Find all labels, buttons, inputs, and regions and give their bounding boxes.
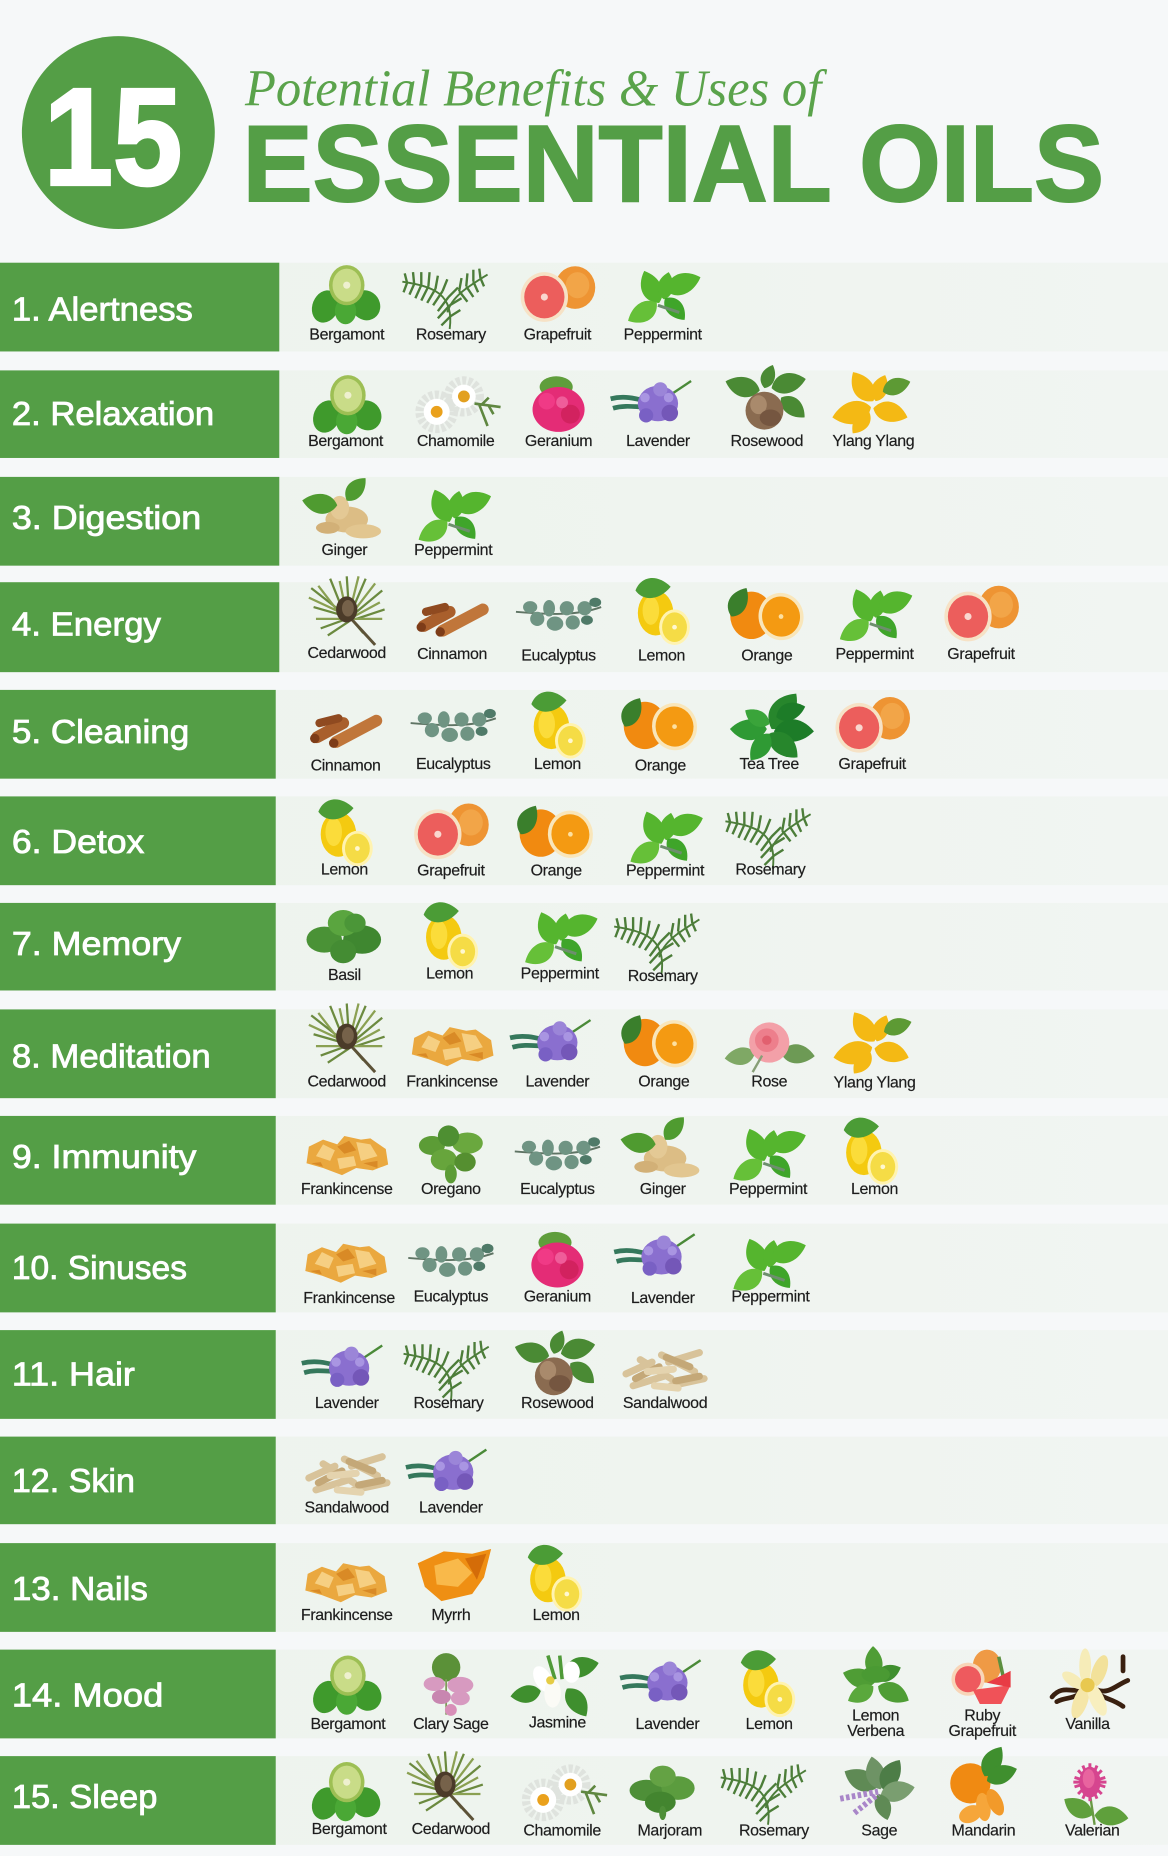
oil: tea tree: Tea Tree: [740, 756, 799, 773]
oil: mandarin: [950, 1742, 1020, 1839]
oil: valerian: Valerian: [1065, 1822, 1120, 1839]
oil: frankincense: Frankincense: [303, 1290, 395, 1307]
oil: cinnamon: Cinnamon: [417, 646, 487, 663]
oil: basil: Basil: [328, 967, 361, 984]
oil: geranium: [525, 376, 592, 450]
oil: lavender: [302, 1345, 382, 1412]
row 8: Meditation: [0, 1003, 1168, 1098]
oil: rosemary: [725, 808, 811, 879]
oil: cedarwood: [407, 1751, 490, 1838]
oil: frankincense: [301, 1136, 393, 1198]
oil: vanilla: Vanilla: [1065, 1716, 1110, 1733]
oil: ruby grapefruit: Ruby: [964, 1708, 1001, 1725]
row 5: Cleaning: [0, 686, 1168, 779]
oil: ruby grapefruit: [948, 1650, 1017, 1740]
oil: bergamont: [307, 1762, 387, 1838]
oil: grapefruit: Grapefruit: [417, 863, 486, 880]
oil: bergamont: Bergamont: [312, 1821, 387, 1838]
oil: lavender: Lavender: [636, 1716, 700, 1733]
oil: clary sage: Clary Sage: [413, 1716, 489, 1733]
oil: geranium: Geranium: [525, 433, 592, 450]
oil: lemon: [530, 690, 586, 773]
oil: lemon: [317, 797, 373, 879]
row label: 15. Sleep: [12, 1779, 157, 1816]
oil: lemon: Lemon: [638, 647, 685, 664]
row 6: Detox: [0, 796, 1168, 885]
oil: bergamont: Bergamont: [310, 1716, 386, 1733]
oil: geranium: Geranium: [524, 1289, 591, 1306]
row 10: Sinuses: [0, 1224, 1168, 1312]
oil: cedarwood: Cedarwood: [307, 1073, 386, 1090]
oil: eucalyptus: Eucalyptus: [521, 647, 596, 664]
oil: ylang ylang: Ylang Ylang: [834, 1075, 915, 1092]
oil: bergamont: Bergamont: [308, 433, 384, 450]
row 11: Hair: [0, 1328, 1168, 1419]
badge: circle with number 15: [22, 36, 215, 229]
oil: eucalyptus: [515, 1137, 600, 1198]
oil: lavender: [406, 1450, 486, 1516]
oil: eucalyptus: [411, 709, 496, 773]
oil: eucalyptus: [516, 598, 601, 664]
oil: chamomile: Chamomile: [417, 433, 495, 450]
oil: oregano: Oregano: [421, 1181, 481, 1198]
oil: peppermint: Peppermint: [414, 542, 493, 559]
oil: lemon verbena: [840, 1645, 913, 1740]
oil: cedarwood: Cedarwood: [412, 1821, 490, 1838]
oil: basil: [306, 910, 381, 984]
row 4: Energy: [0, 576, 1168, 672]
oil: peppermint: [729, 1125, 809, 1198]
oil: lavender: [611, 381, 691, 450]
oil: valerian: [1059, 1763, 1129, 1839]
oil: lemon: Lemon: [851, 1181, 898, 1198]
oil: lavender: [614, 1234, 696, 1307]
oil: peppermint: Peppermint: [624, 327, 703, 344]
oil: lemon: Lemon: [534, 756, 581, 773]
oil: lemon: Lemon: [426, 966, 473, 983]
oil: jasmine: [509, 1653, 601, 1732]
oil: cedarwood: Cedarwood: [307, 645, 386, 662]
oil: lemon: [740, 1648, 795, 1733]
oil: sandalwood: Sandalwood: [305, 1499, 389, 1516]
oil: oregano: [419, 1125, 483, 1198]
oil: frankincense: Frankincense: [406, 1073, 498, 1090]
oil: frankincense: Frankincense: [301, 1181, 393, 1198]
oil: sandalwood: [623, 1353, 707, 1412]
oil: rosemary: Rosemary: [416, 327, 486, 344]
oil: grapefruit: Grapefruit: [838, 756, 907, 773]
oil: lavender: Lavender: [631, 1290, 696, 1307]
oil: myrrh: Myrrh: [431, 1607, 470, 1624]
heading: potential benefits line: Potential Benefits & Uses of: [244, 60, 828, 117]
oil: cinnamon: [310, 718, 381, 774]
oil: ginger: [301, 472, 381, 559]
oil: rosewood: [723, 362, 811, 450]
oil: orange: Orange: [638, 1073, 690, 1090]
oil: lemon: [843, 1116, 898, 1198]
oil: chamomile: [523, 1770, 607, 1839]
oil: rosemary: [614, 914, 699, 985]
oil: grapefruit: [944, 586, 1019, 663]
oil: tea tree: [730, 686, 814, 773]
oil: peppermint: Peppermint: [729, 1181, 808, 1198]
oil: rosemary: Rosemary: [628, 968, 698, 985]
oil: clary sage: [413, 1653, 489, 1733]
oil: orange: [616, 693, 701, 774]
oil: grapefruit: [521, 266, 595, 344]
oil: lavender: Lavender: [419, 1499, 484, 1516]
badge: circle with number 15: 15: [44, 61, 182, 215]
oil: myrrh: [418, 1549, 491, 1624]
row label: 5. Cleaning: [12, 714, 189, 751]
oil: sage: [840, 1754, 917, 1839]
row label: 13. Nails: [12, 1571, 148, 1608]
row label: 2. Relaxation: [12, 396, 214, 433]
oil: frankincense: Frankincense: [301, 1607, 393, 1624]
oil: lemon: Lemon: [533, 1607, 580, 1624]
row 15: Sleep: [0, 1742, 1168, 1845]
oil: rosewood: Rosewood: [731, 433, 803, 450]
header: title block: [22, 36, 1104, 229]
oil: lemon: Lemon: [321, 862, 368, 879]
oil: eucalyptus: Eucalyptus: [416, 756, 491, 773]
oil: lemon verbena: Lemon: [852, 1708, 899, 1725]
oil: bergamont: [308, 375, 387, 450]
oil: bergamont: [307, 265, 386, 344]
oil: rosemary: [404, 1341, 489, 1412]
oil: grapefruit: Grapefruit: [947, 646, 1016, 663]
oil: ylang ylang: [830, 367, 914, 450]
oil: rose: Rose: [751, 1073, 788, 1090]
oil: ruby grapefruit: Grapefruit: [948, 1723, 1017, 1740]
oil: sandalwood: [305, 1457, 389, 1516]
row label: 14. Mood: [12, 1677, 163, 1714]
oil: peppermint: Peppermint: [835, 646, 914, 663]
oil: frankincense: [303, 1244, 395, 1307]
oil: eucalyptus: [408, 1244, 493, 1306]
oil: lavender: [620, 1660, 701, 1733]
row label: 8. Meditation: [12, 1038, 211, 1075]
oil: rosemary: [721, 1764, 809, 1839]
oil: bergamont: [308, 1656, 387, 1733]
oil: grapefruit: [835, 697, 910, 773]
oil: lemon: [527, 1543, 582, 1624]
oil: sandalwood: Sandalwood: [623, 1395, 707, 1412]
oil: peppermint: Peppermint: [731, 1289, 810, 1306]
oil: ylang ylang: Ylang Ylang: [832, 433, 914, 450]
oil: frankincense: [301, 1563, 393, 1624]
oil: lemon verbena: Verbena: [847, 1723, 905, 1740]
heading: essential oils: ESSENTIAL OILS: [243, 103, 1104, 225]
oil: peppermint: [626, 808, 706, 880]
row 13: Nails: [0, 1543, 1168, 1632]
oil: peppermint: [835, 585, 916, 663]
oil: orange: [512, 801, 597, 880]
oil: ginger: [619, 1112, 699, 1198]
row label: 1. Alertness: [12, 292, 193, 329]
row label: 6. Detox: [12, 824, 145, 861]
row 14: Mood: [0, 1645, 1168, 1740]
oil: eucalyptus: Eucalyptus: [520, 1181, 595, 1198]
row label: 3. Digestion: [12, 500, 201, 537]
oil: cinnamon: Cinnamon: [311, 757, 381, 774]
oil: orange: [723, 583, 808, 664]
oil: peppermint: [623, 267, 704, 344]
oil: orange: Orange: [635, 757, 686, 774]
oil: marjoram: Marjoram: [637, 1822, 702, 1839]
oil: rosemary: Rosemary: [739, 1822, 809, 1839]
row label: 11. Hair: [12, 1357, 135, 1394]
oil: peppermint: [729, 1235, 810, 1306]
oil: eucalyptus: Eucalyptus: [414, 1289, 489, 1306]
oil: rosewood: Rosewood: [521, 1395, 594, 1412]
oil: jasmine: Jasmine: [529, 1715, 586, 1732]
row label: 10. Sinuses: [12, 1250, 187, 1287]
oil: lemon: Lemon: [746, 1716, 793, 1733]
oil: peppermint: [414, 486, 495, 559]
oil: lavender: [510, 1020, 591, 1090]
oil: cedarwood: [307, 576, 386, 662]
row label: 7. Memory: [12, 926, 182, 963]
row 1: Alertness: [0, 263, 1168, 351]
oil: lemon: [634, 576, 690, 664]
oil: orange: [616, 1011, 701, 1090]
row label: 9. Immunity: [12, 1139, 197, 1176]
oil: peppermint: Peppermint: [521, 966, 600, 983]
row 3: Digestion: [0, 472, 1168, 566]
oil: lavender: Lavender: [626, 433, 691, 450]
oil: mandarin: Mandarin: [952, 1822, 1015, 1839]
row label: 4. Energy: [12, 606, 161, 643]
oil: geranium: [524, 1232, 591, 1306]
oil: vanilla: [1052, 1648, 1128, 1733]
oil: cedarwood: [307, 1003, 386, 1090]
oil: chamomile: Chamomile: [523, 1822, 601, 1839]
oil: ylang ylang: [831, 1007, 915, 1092]
oil: marjoram: [630, 1766, 702, 1839]
oil: sage: Sage: [861, 1822, 898, 1839]
oil: lavender: Lavender: [315, 1395, 380, 1412]
oil: peppermint: [520, 908, 601, 983]
oil: rosemary: Rosemary: [735, 862, 806, 879]
row 12: Skin: [0, 1437, 1168, 1524]
oil: orange: Orange: [531, 863, 582, 880]
oil: lemon: [423, 900, 478, 983]
oil: peppermint: Peppermint: [626, 863, 705, 880]
oil: rosemary: Rosemary: [414, 1395, 484, 1412]
oil: bergamont: Bergamont: [309, 327, 385, 344]
row 7: Memory: [0, 900, 1168, 990]
row 2: Relaxation: [0, 362, 1168, 458]
oil: grapefruit: [414, 804, 489, 880]
oil: ginger: Ginger: [321, 542, 368, 559]
oil: rosemary: [402, 269, 488, 344]
oil: cinnamon: [417, 607, 487, 663]
row label: 12. Skin: [12, 1463, 135, 1500]
oil: orange: Orange: [741, 647, 793, 664]
oil: ginger: Ginger: [640, 1181, 687, 1198]
oil: rosewood: [512, 1328, 600, 1412]
oil: grapefruit: Grapefruit: [524, 327, 592, 344]
oil: chamomile: [417, 382, 501, 450]
oil: frankincense: [406, 1027, 498, 1090]
row 9: Immunity: [0, 1112, 1168, 1205]
oil: rose: [723, 1022, 816, 1090]
oil: lavender: Lavender: [525, 1073, 590, 1090]
